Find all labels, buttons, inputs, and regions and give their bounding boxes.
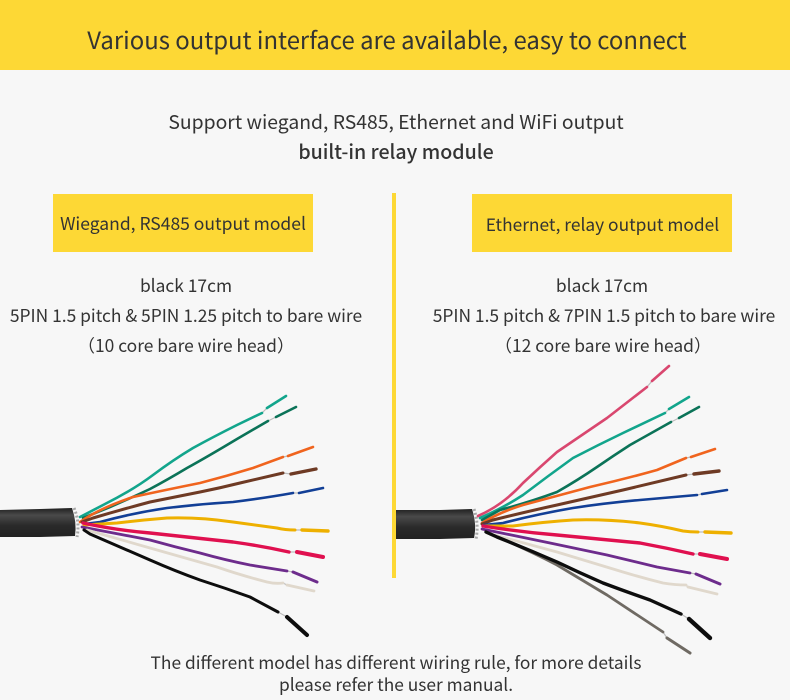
footer note: please refer the user manual. xyxy=(279,671,513,696)
footer note xyxy=(151,649,641,696)
right model description: black 17cm xyxy=(556,273,648,298)
subtitle: Support wiegand, RS485, Ethernet and WiFi output xyxy=(168,107,624,135)
right model description: 5PIN 1.5 pitch & 7PIN 1.5 pitch to bare wire xyxy=(433,303,775,328)
right model description xyxy=(433,273,775,358)
title banner: Various output interface are available, easy to connect xyxy=(87,20,687,56)
left model description: black 17cm xyxy=(140,273,232,298)
subtitle xyxy=(168,107,624,165)
right model label: Ethernet, relay output model xyxy=(486,210,719,236)
left model label xyxy=(53,194,313,252)
centre divider xyxy=(392,193,396,578)
left model description: 5PIN 1.5 pitch & 5PIN 1.25 pitch to bare wire xyxy=(10,303,362,328)
left model description xyxy=(10,273,362,358)
right cable: 12 core xyxy=(396,366,731,653)
left model description: （10 core bare wire head） xyxy=(78,333,294,358)
footer note: The different model has different wiring rule, for more details xyxy=(151,649,641,674)
right model description: （12 core bare wire head） xyxy=(495,333,711,358)
subtitle: built-in relay module xyxy=(298,136,494,165)
right model label xyxy=(472,194,732,252)
title banner xyxy=(0,0,790,70)
left cable: 10 core xyxy=(0,396,328,635)
left model label: Wiegand, RS485 output model xyxy=(60,210,306,236)
